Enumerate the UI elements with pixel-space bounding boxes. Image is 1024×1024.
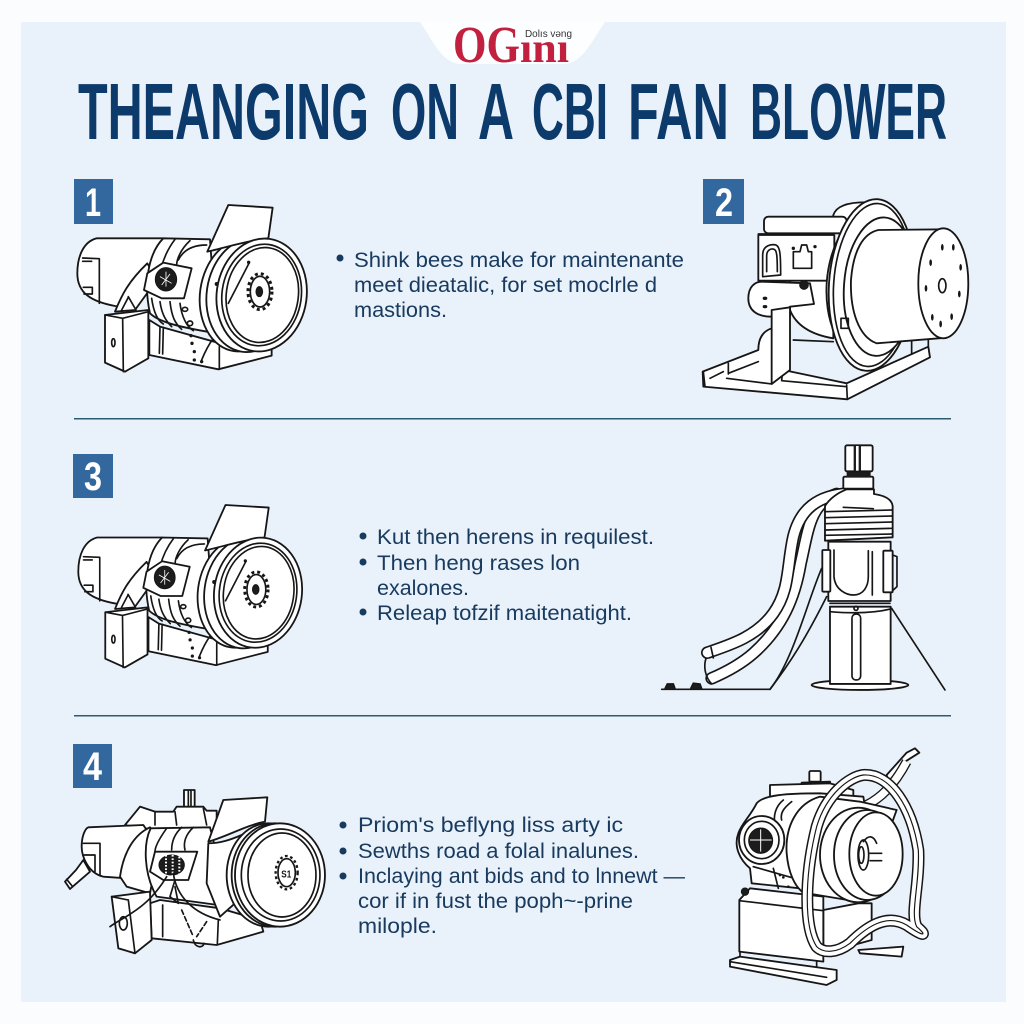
step 1 text: meet dieatalic, for set moclrle d bbox=[354, 274, 657, 297]
step 3 text bbox=[360, 526, 654, 625]
step 4 text: cor if in fust the poph~-prine bbox=[358, 890, 633, 913]
step 3 text: exalones. bbox=[377, 577, 469, 600]
step 1 text: mastions. bbox=[354, 299, 447, 322]
icon: compact blower with looped hose bbox=[730, 748, 923, 985]
title: A bbox=[478, 67, 514, 156]
title: CBI bbox=[532, 67, 608, 156]
step 3 text: Kut then herens in requilest. bbox=[377, 526, 654, 549]
icon: fan blower, repeated view bbox=[78, 505, 309, 667]
step 4 text bbox=[340, 814, 685, 938]
icon: fan blower, side view bbox=[77, 205, 314, 372]
title: ON bbox=[391, 67, 459, 156]
step 3 text: Releap tofzif maitenatight. bbox=[377, 602, 632, 625]
logo bbox=[420, 17, 605, 74]
step 4 text: milople. bbox=[358, 915, 437, 938]
icon: upright pump with hoses bbox=[662, 445, 945, 690]
logo: Dolıs vəng bbox=[525, 29, 572, 40]
divider bbox=[74, 418, 951, 420]
step 4 badge: 4 bbox=[83, 745, 103, 789]
step 2 badge bbox=[703, 179, 744, 225]
icon: fan blower with cables bbox=[65, 790, 325, 953]
title bbox=[78, 67, 947, 156]
step 1 badge bbox=[74, 179, 113, 225]
step 4 text: Sewths road a folal inalunes. bbox=[358, 840, 639, 863]
title: FAN bbox=[628, 67, 729, 156]
step 1 text: Shink bees make for maintenante bbox=[354, 249, 684, 272]
step 3 badge: 3 bbox=[84, 455, 102, 499]
icon: blower on frame with cylinder bbox=[703, 196, 968, 399]
step 1 text bbox=[336, 249, 684, 322]
divider bbox=[74, 715, 951, 716]
step 1 badge: 1 bbox=[85, 181, 101, 225]
step 4 text: Inclaying ant bids and to lnnewt — bbox=[358, 865, 685, 888]
step 3 text: Then heng rases lon bbox=[377, 552, 580, 575]
icon: fan blower with cables: S1 bbox=[281, 869, 292, 880]
step 2 badge: 2 bbox=[715, 181, 733, 225]
logo: OG bbox=[453, 17, 520, 74]
step 4 text: Priom's beflyng liss arty ic bbox=[358, 814, 623, 837]
logo: ını bbox=[520, 26, 569, 72]
title: THEANGING bbox=[78, 67, 369, 156]
step 4 badge bbox=[73, 744, 112, 789]
step 3 badge bbox=[73, 454, 113, 499]
